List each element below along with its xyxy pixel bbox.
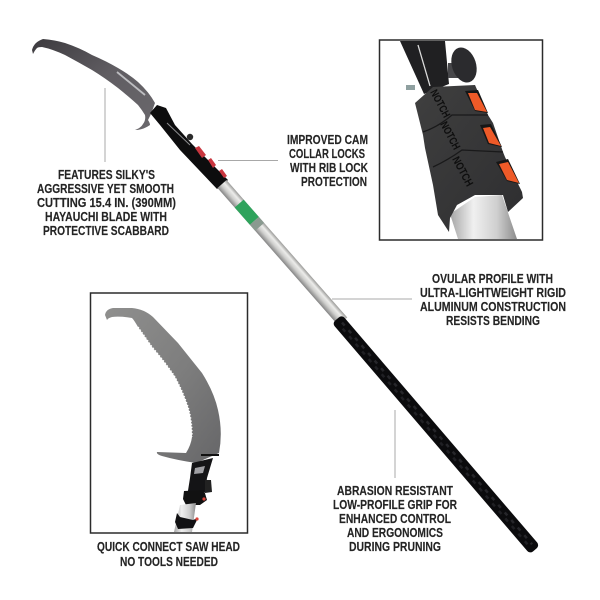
main product: pole saw bbox=[32, 39, 540, 554]
text: abrasion resistant grip: ENHANCED CONTROL bbox=[339, 512, 451, 526]
notch branding: NOTCH bbox=[449, 155, 475, 189]
text: blade feature: HAYAUCHI BLADE WITH bbox=[45, 210, 167, 224]
leader line: blade bbox=[104, 88, 106, 162]
notch branding bbox=[427, 88, 475, 189]
text: ovular profile: RESISTS BENDING bbox=[446, 314, 540, 328]
bare saw blade bbox=[105, 308, 221, 463]
text: abrasion resistant grip bbox=[333, 484, 457, 554]
text: abrasion resistant grip: AND ERGONOMICS bbox=[347, 526, 443, 540]
text: abrasion resistant grip: LOW-PROFILE GRIP FOR bbox=[333, 498, 457, 512]
leader line: pole bbox=[332, 298, 412, 300]
panel: collar close-up bbox=[380, 40, 542, 240]
rubber grip bbox=[332, 315, 540, 554]
cam collar bbox=[415, 85, 523, 232]
saw head connector bbox=[174, 454, 219, 532]
text: abrasion resistant grip: DURING PRUNING bbox=[349, 540, 441, 554]
notch branding: NOTCH bbox=[427, 88, 452, 120]
text: blade feature: FEATURES SILKY'S bbox=[58, 168, 155, 182]
bolt bbox=[406, 85, 415, 90]
text: blade feature: PROTECTIVE SCABBARD bbox=[43, 224, 169, 238]
saw head and collar bbox=[150, 105, 228, 189]
text: cam collar locks: IMPROVED CAM bbox=[287, 133, 368, 147]
saw teeth bbox=[138, 327, 192, 437]
text: quick connect bbox=[97, 540, 240, 569]
text: abrasion resistant grip: ABRASION RESISTANT bbox=[337, 484, 453, 498]
barcode sticker bbox=[250, 217, 264, 231]
text: ovular profile: ALUMINUM CONSTRUCTION bbox=[420, 300, 566, 314]
aluminum tube bbox=[450, 195, 517, 239]
text: quick connect: NO TOOLS NEEDED bbox=[120, 555, 218, 569]
notch branding: NOTCH bbox=[437, 120, 462, 152]
text: blade feature: AGGRESSIVE YET SMOOTH bbox=[37, 182, 174, 196]
locking knob bbox=[447, 44, 481, 86]
aluminum pole bbox=[217, 180, 347, 325]
dark pole section bbox=[400, 41, 449, 94]
text: cam collar locks: COLLAR LOCKS bbox=[289, 147, 365, 161]
text: ovular profile: OVULAR PROFILE WITH bbox=[432, 272, 553, 286]
text: ovular profile: ULTRA-LIGHTWEIGHT RIGID bbox=[420, 286, 566, 300]
orange rib locks bbox=[465, 90, 520, 184]
green label bbox=[235, 200, 259, 225]
leader line: grip bbox=[394, 410, 396, 478]
text: blade feature bbox=[37, 168, 176, 238]
panel: quick connect saw head bbox=[90, 293, 248, 533]
text: cam collar locks: WITH RIB LOCK bbox=[290, 161, 368, 175]
saw blade with scabbard bbox=[32, 39, 155, 130]
text: cam collar locks bbox=[287, 133, 368, 189]
leader line: collar bbox=[218, 160, 278, 162]
text: quick connect: QUICK CONNECT SAW HEAD bbox=[97, 540, 240, 554]
text: ovular profile bbox=[420, 272, 566, 328]
text: blade feature: CUTTING 15.4 IN. (390MM) bbox=[37, 196, 176, 210]
blade logo bbox=[117, 72, 145, 95]
text: cam collar locks: PROTECTION bbox=[301, 175, 367, 189]
